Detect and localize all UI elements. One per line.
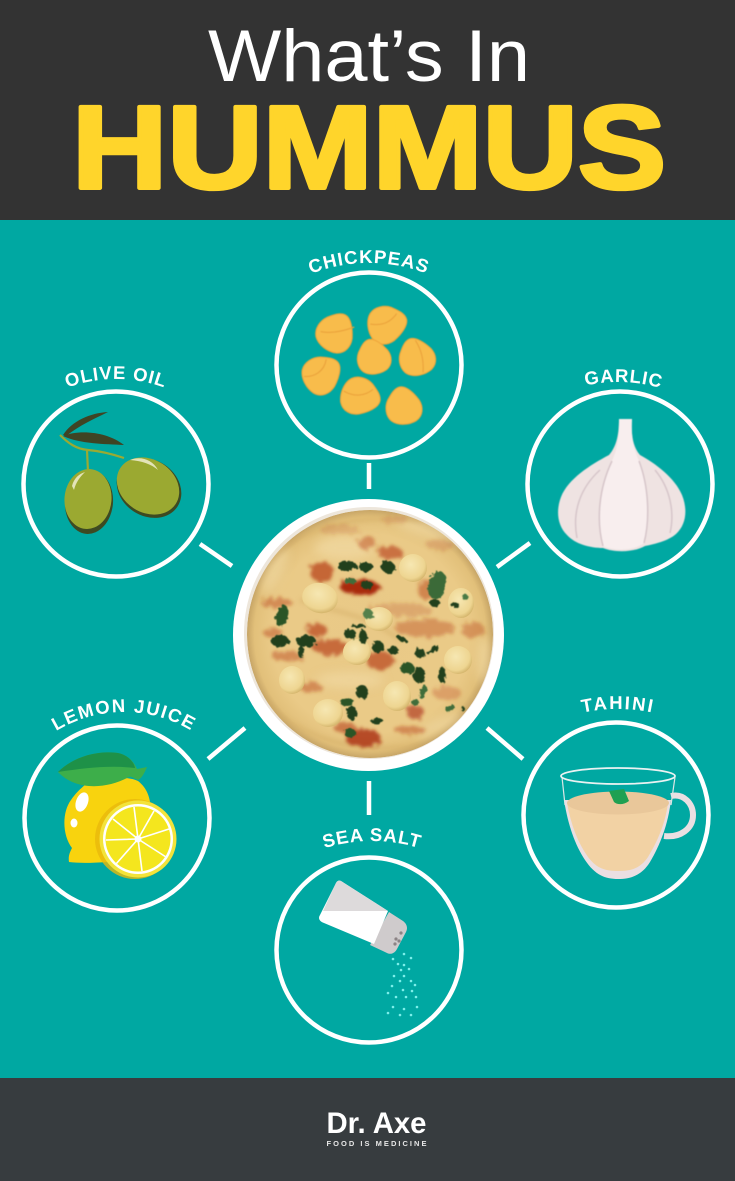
title line: HUMMUS: HUMMUS <box>72 82 666 214</box>
ingredient: sea salt <box>274 828 464 1045</box>
ingredient: tahini <box>521 696 711 910</box>
logo: Dr. Axe: Dr. Axe <box>326 1107 426 1140</box>
ingredient: garlic <box>525 369 715 579</box>
ingredient: lemon juice <box>22 699 212 913</box>
icon: garlic bulb <box>558 419 685 551</box>
label: chickpeas: CHICKPEAS <box>309 250 428 272</box>
centre: hummus bowl <box>233 499 504 771</box>
title line: What's In: What’s In <box>208 16 530 97</box>
ingredient: chickpeas <box>274 250 464 460</box>
icon: olives <box>60 412 193 536</box>
paprika dusting <box>261 516 485 747</box>
chickpea garnish <box>279 554 474 727</box>
teal background panel <box>0 220 735 1078</box>
header band <box>0 0 735 220</box>
tagline: FOOD IS MEDICINE <box>326 1139 426 1148</box>
parsley flakes <box>271 558 468 737</box>
label: sea salt: SEA SALT <box>323 828 422 848</box>
icon: lemon <box>58 752 176 879</box>
ingredient: olive oil <box>21 366 211 579</box>
icon: chickpeas <box>296 303 439 426</box>
icon: salt shaker <box>319 881 418 1016</box>
label: lemon juice: LEMON JUICE <box>51 699 196 730</box>
hummus surface <box>247 510 493 758</box>
icon: tahini cup <box>561 768 693 879</box>
footer band <box>0 1078 735 1181</box>
label: tahini: TAHINI <box>580 696 653 712</box>
connector lines <box>200 463 530 815</box>
label: garlic: GARLIC <box>585 369 662 387</box>
label: olive oil: OLIVE OIL <box>66 366 164 388</box>
